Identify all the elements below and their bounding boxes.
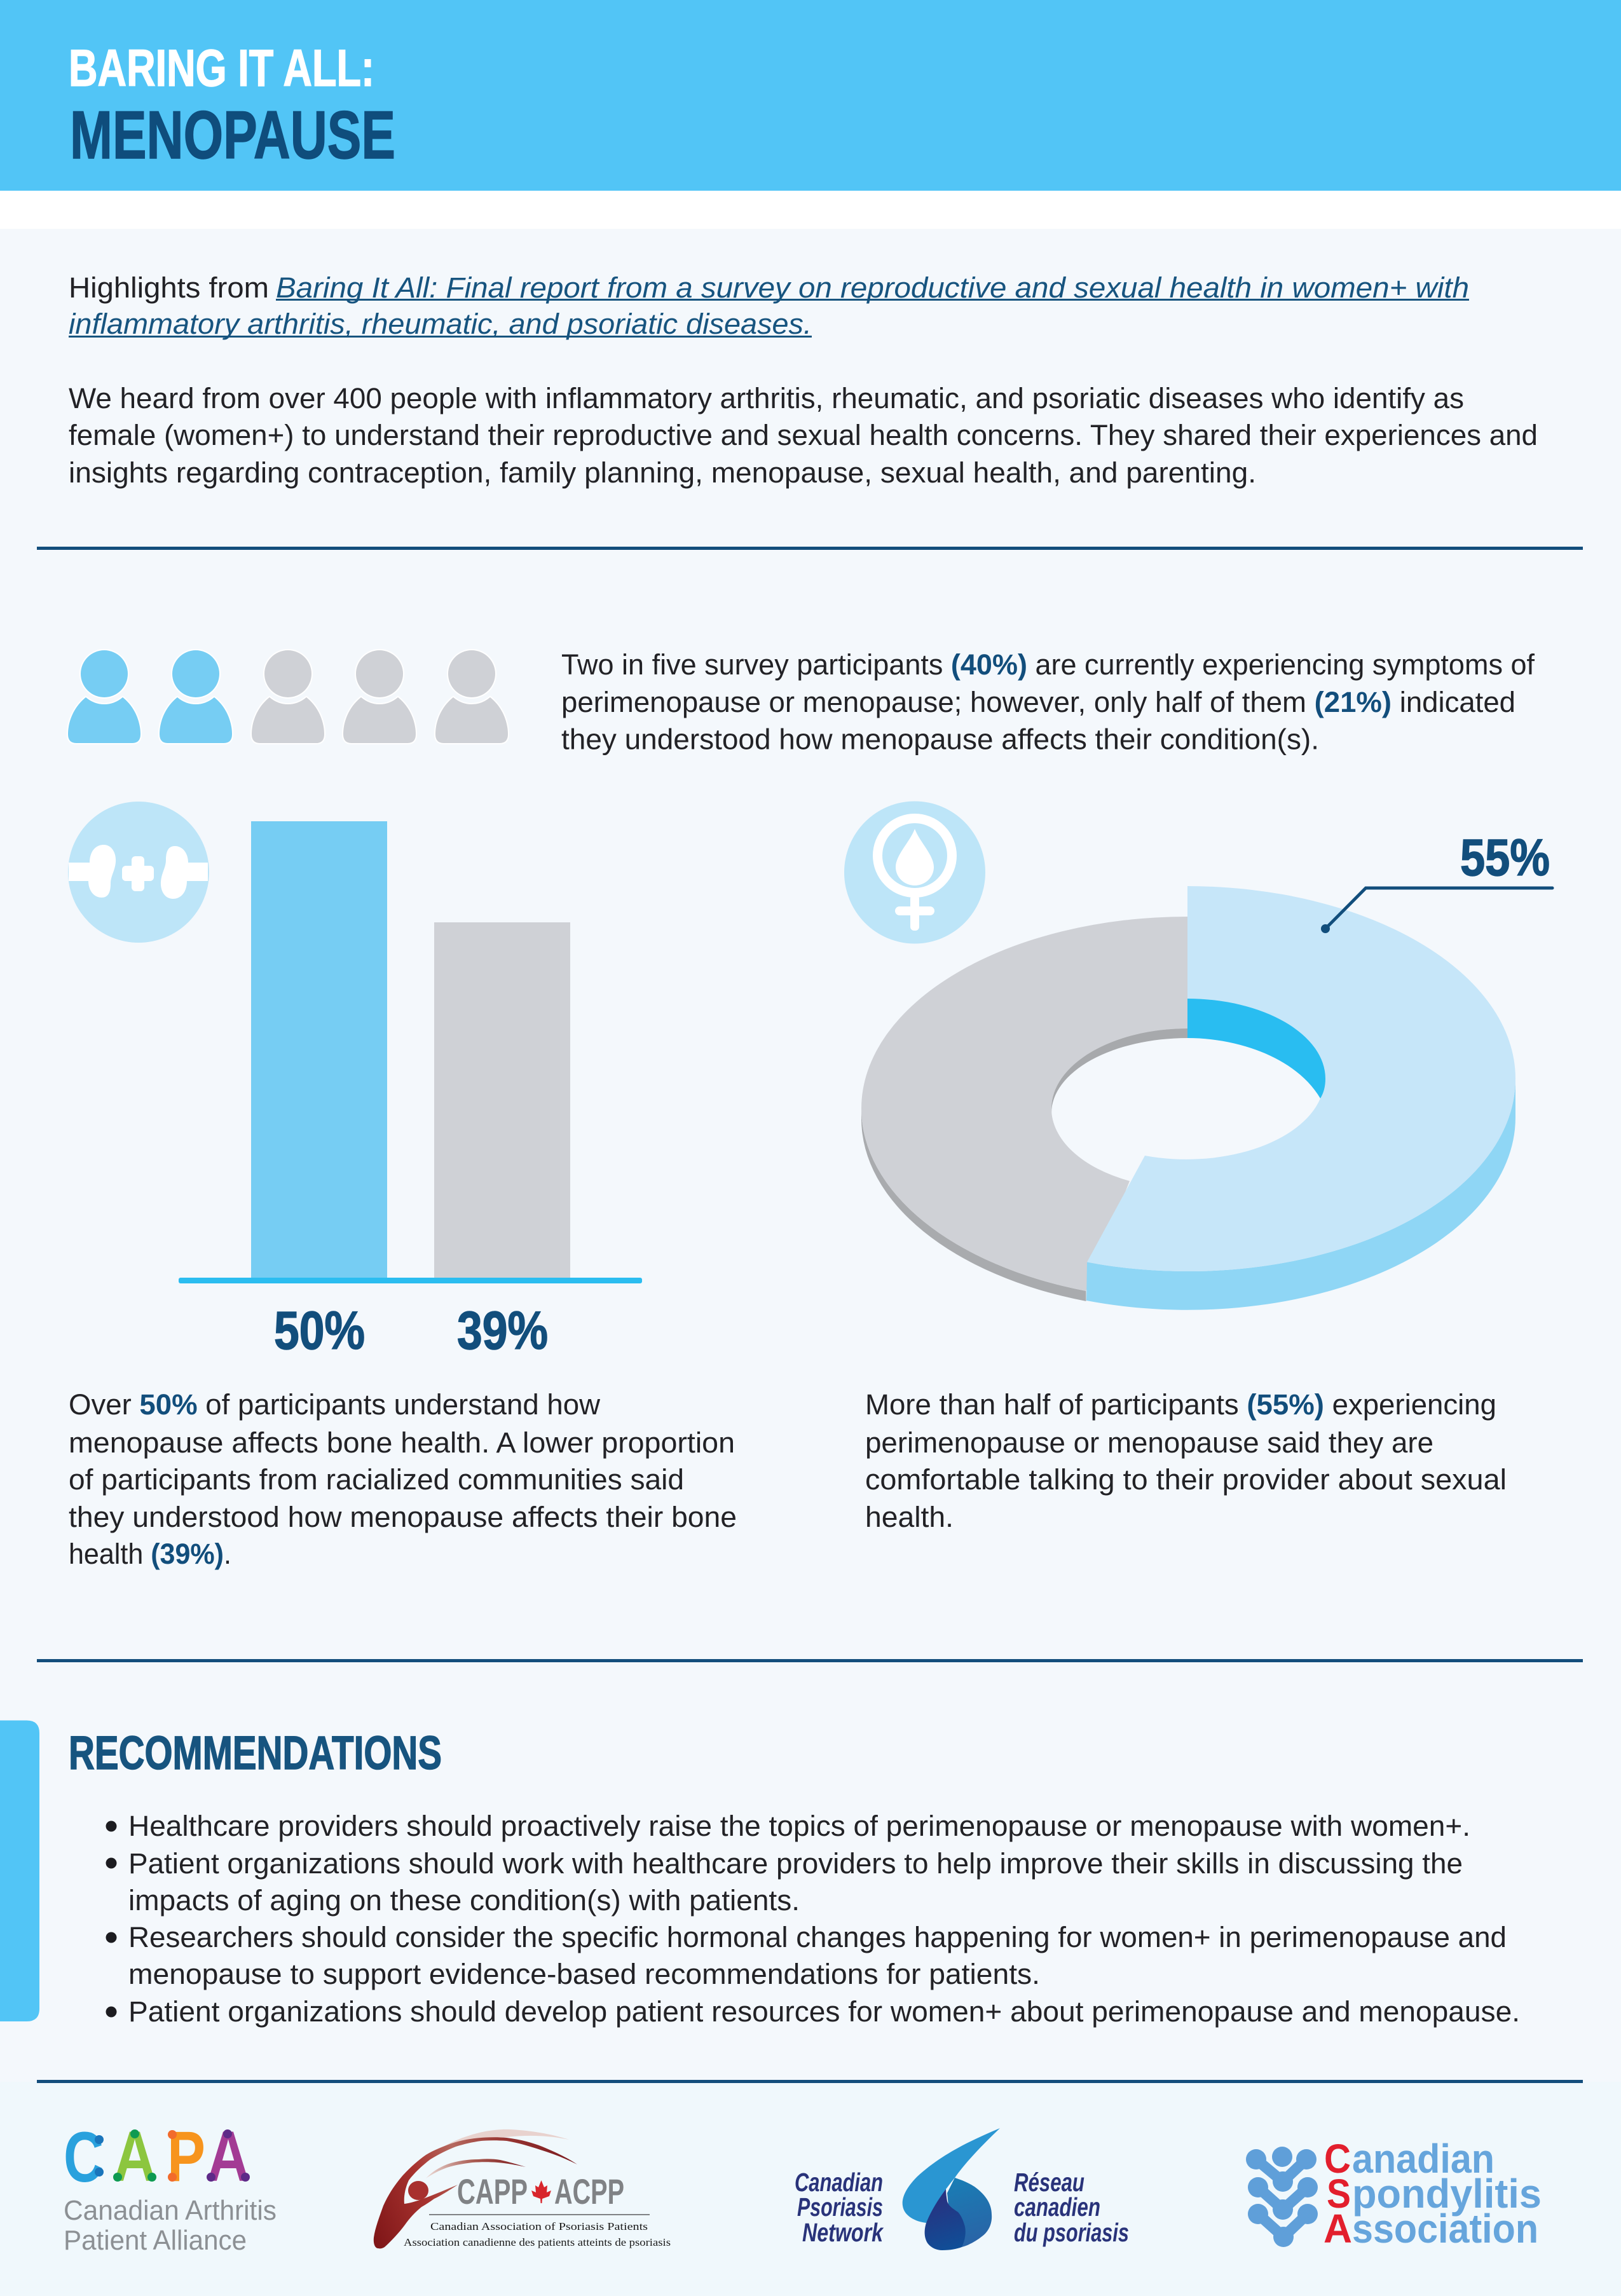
icon: female symbol with drop [844, 801, 985, 943]
text: bone health [69, 1388, 737, 1570]
logo: Canadian Spondylitis Association: C [1324, 2136, 1351, 2182]
label: 39%: 39% [457, 1301, 548, 1360]
logo: Canadian Spondylitis Association: A [1323, 2206, 1352, 2252]
grey segment top [861, 917, 1187, 1291]
callout: 55% [1321, 829, 1552, 933]
text: bone health: health (39%). [69, 1538, 231, 1570]
grey inner wall [1051, 1028, 1187, 1113]
label: 50%: 50% [274, 1301, 365, 1360]
logo: Canadian Psoriasis Network: Psoriasis [797, 2192, 883, 2222]
text: provider comfort: comfortable talking to their provider about sexual [865, 1463, 1507, 1496]
light blue segment top [1087, 886, 1515, 1271]
logo: CAPA: Patient Alliance [64, 2225, 247, 2256]
donut chart: 55% comfortable [861, 829, 1552, 1310]
bar: all participants 50% [251, 821, 387, 1280]
highlights line: inflammatory arthritis, rheumatic, and psoriatic diseases. [69, 308, 812, 340]
intro text block [69, 271, 1538, 489]
bar chart: bone health understanding [179, 821, 642, 1360]
text: two in five: perimenopause or menopause; however, only half of them (21%) indicated [561, 686, 1515, 718]
highlights line [69, 271, 1469, 340]
logo: Canadian Psoriasis Network: du psoriasis [1014, 2218, 1129, 2247]
logo: CAPA: C [64, 2117, 104, 2197]
person 3 [252, 650, 324, 743]
logo: Canadian Spondylitis Association: S [1327, 2171, 1351, 2217]
logo: CAPP ACPP [374, 2129, 671, 2248]
recommendations list [106, 1810, 1520, 2028]
logo: Canadian Spondylitis Association [1246, 2136, 1542, 2252]
text: bone health: they understood how menopause affects their bone [69, 1501, 737, 1533]
bar: racialized communities 39% [434, 922, 570, 1280]
text: provider comfort: perimenopause or menopause said they are [865, 1426, 1433, 1459]
logo: CAPA [64, 2117, 277, 2256]
logo: Canadian Psoriasis Network: Network [802, 2218, 884, 2247]
highlights line: Highlights from [69, 271, 269, 304]
logo: CAPP ACPP: Association canadienne des patients atteints de psoriasis [404, 2236, 671, 2248]
survey description paragraph [69, 382, 1538, 489]
person 5 [435, 650, 508, 743]
person 1 (highlighted) [68, 650, 140, 743]
logo: Canadian Spondylitis Association: anadian [1352, 2136, 1494, 2182]
pictogram: two in five people [68, 650, 508, 743]
highlights line: Baring It All: Final report from a survey on reproductive and sexual health in women+ with [276, 271, 1469, 304]
person 2 (highlighted) [160, 650, 232, 743]
logo: Canadian Psoriasis Network: Canadian [795, 2168, 883, 2197]
icon: bone joint [68, 802, 209, 943]
logo: CAPP ACPP: ACPP [554, 2171, 624, 2211]
text: bone health: menopause affects bone health. A lower proportion [69, 1426, 735, 1459]
logo: Canadian Psoriasis Network: canadien [1014, 2192, 1100, 2222]
callout: 55%: 55% [1460, 829, 1550, 887]
survey description paragraph: insights regarding contraception, family planning, menopause, sexual health, and parenting. [69, 456, 1256, 489]
heading: recommendations: RECOMMENDATIONS [69, 1726, 442, 1779]
logo: Canadian Psoriasis Network: Réseau [1014, 2168, 1084, 2197]
recommendation 2: impacts of aging on these condition(s) with patients. [128, 1884, 800, 1917]
logo: CAPP ACPP: Canadian Association of Psoriasis Patients [430, 2220, 648, 2232]
survey description paragraph: We heard from over 400 people with inflammatory arthritis, rheumatic, and psoriatic diseases who identify as [69, 382, 1464, 414]
logo: CAPA: P [167, 2117, 205, 2196]
recommendation 3 [106, 1921, 1507, 1990]
text: provider comfort [865, 1388, 1507, 1533]
side tab [0, 1720, 39, 2021]
recommendation 1: Healthcare providers should proactively raise the topics of perimenopause or menopause with women+. [128, 1810, 1470, 1842]
text: bone health: Over 50% of participants understand how [69, 1388, 601, 1421]
text: two in five [561, 648, 1535, 755]
recommendation 2 [106, 1847, 1463, 1917]
bright blue inner wall [1187, 999, 1325, 1098]
text: provider comfort: More than half of participants (55%) experiencing [865, 1388, 1496, 1421]
text: provider comfort: health. [865, 1501, 954, 1533]
survey description paragraph: female (women+) to understand their reproductive and sexual health concerns. They shared their experiences and [69, 419, 1538, 451]
logo: Canadian Spondylitis Association: ssociation [1352, 2206, 1538, 2252]
logo: Canadian Spondylitis Association: pondylitis [1352, 2171, 1542, 2217]
logo: CAPA: A [207, 2117, 250, 2196]
person 4 [343, 650, 416, 743]
logo: CAPA: Canadian Arthritis [64, 2195, 277, 2226]
title: Menopause: MENOPAUSE [70, 97, 395, 173]
light blue segment side [1086, 1079, 1515, 1310]
recommendation 2: Patient organizations should work with healthcare providers to help improve their skills in discussing the [128, 1847, 1463, 1880]
logo: CAPP ACPP: CAPP [457, 2171, 528, 2211]
text: two in five: Two in five survey participants (40%) are currently experiencing symptoms of [561, 648, 1535, 681]
recommendation 3: Researchers should consider the specific hormonal changes happening for women+ in perimenopause and [128, 1921, 1507, 1953]
grey segment side [861, 1109, 1086, 1301]
recommendation 4: Patient organizations should develop patient resources for women+ about perimenopause and menopause. [128, 1995, 1520, 2028]
logo: Canadian Psoriasis Network [795, 2128, 1129, 2250]
text: two in five: they understood how menopause affects their condition(s). [561, 723, 1319, 755]
title: Baring It All: BARING IT ALL: [69, 39, 374, 97]
recommendation 3: menopause to support evidence-based recommendations for patients. [128, 1958, 1040, 1990]
header banner [0, 0, 1621, 191]
logo: CAPA: A [113, 2117, 156, 2196]
text: bone health: of participants from racialized communities said [69, 1463, 684, 1496]
